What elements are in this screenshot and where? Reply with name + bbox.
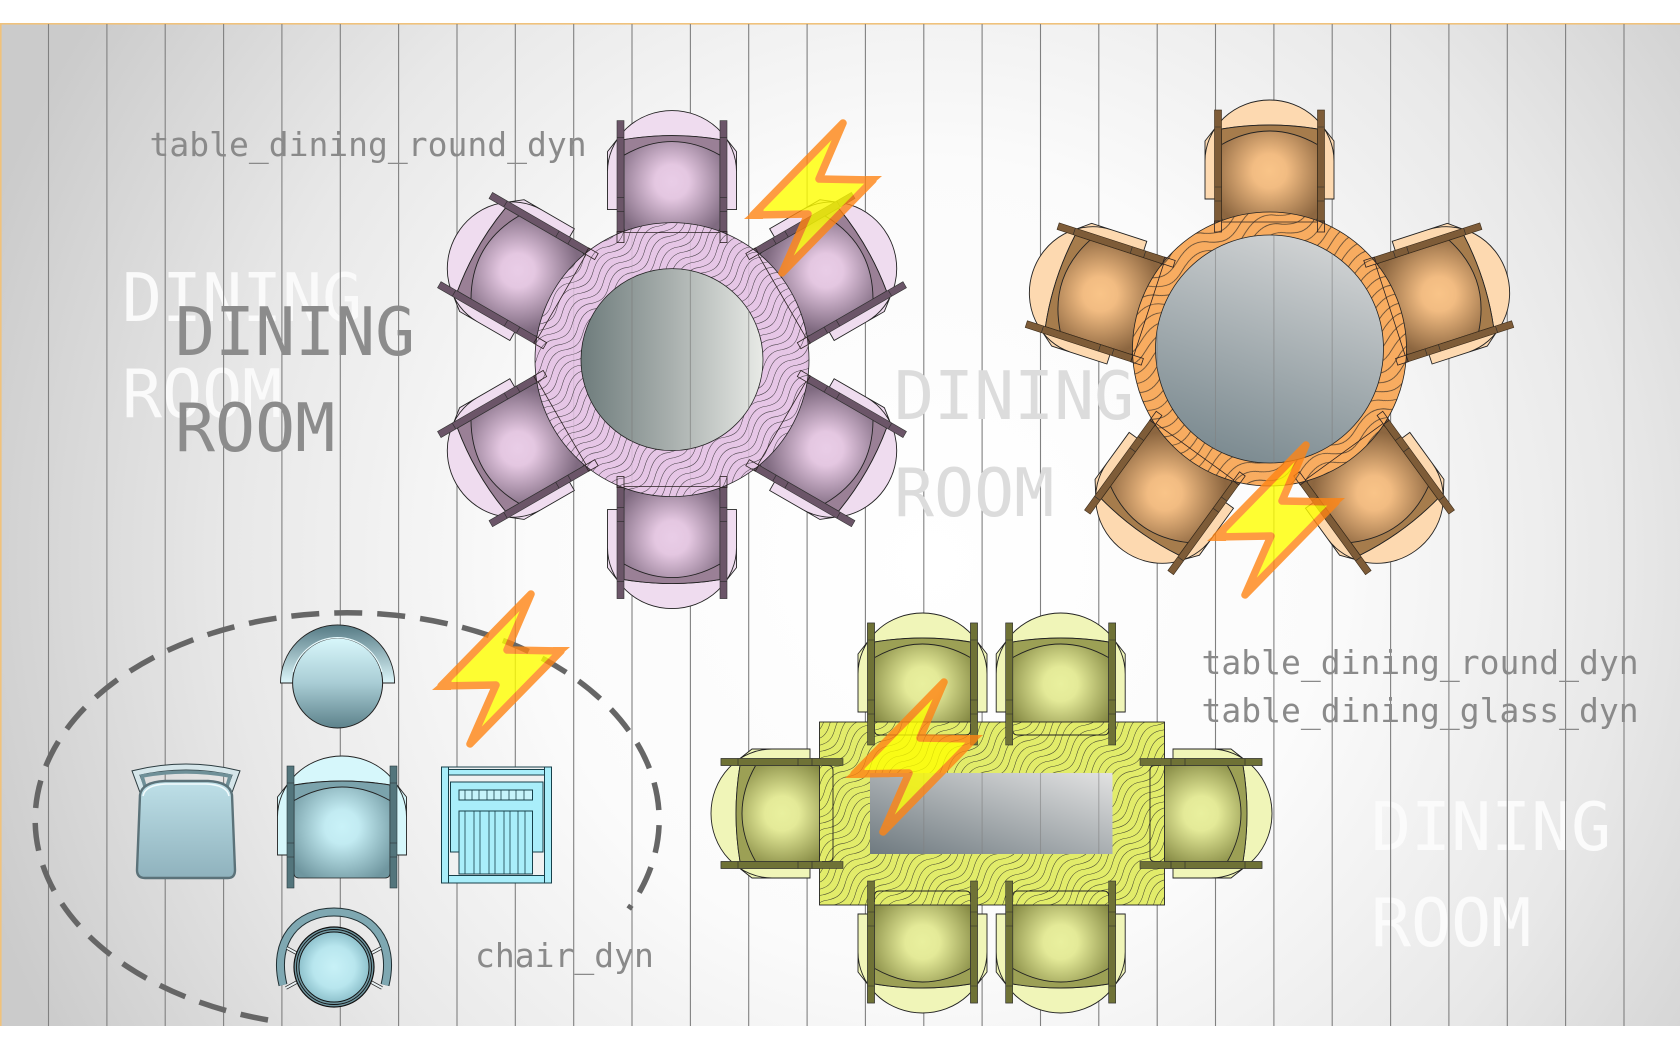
orange chair left [1013, 211, 1178, 374]
orange chair lower right [1286, 406, 1468, 588]
grey dining room label [175, 293, 415, 467]
label: table_dining_round_dyn top: table_dining_round_dyn [150, 125, 587, 165]
pale dining room label: ROOM [894, 454, 1054, 532]
teal chair: armchair, centre [278, 756, 406, 888]
purple chair lower right [741, 362, 920, 540]
white dining room label, left: ROOM [122, 355, 282, 433]
purple chair lower left [424, 362, 603, 540]
white dining room label, left: DINING [122, 259, 362, 337]
round glass top, purple table [581, 269, 763, 451]
labels: table names right: table_dining_glass_dyn [1202, 691, 1639, 731]
white dining room label, left [122, 259, 362, 433]
green chair bottom right [996, 881, 1125, 1013]
purple chair bottom [608, 477, 736, 609]
dashed ellipse [35, 613, 659, 1020]
green chair right [1140, 749, 1272, 878]
white dining room label, right: DINING [1371, 788, 1611, 866]
purple chair upper right [741, 179, 920, 357]
green chair top left [858, 613, 987, 745]
purple wood ring [534, 223, 810, 497]
purple round table with six chairs [32, 110, 907, 1020]
lightning bolt on orange table [1207, 445, 1345, 595]
grey dining room label: DINING [175, 293, 415, 371]
purple chair top [608, 111, 736, 243]
labels: table names right: table_dining_round_dyn [1202, 643, 1639, 683]
teal chair: round seat with horseshoe back, bottom [280, 912, 388, 1007]
green rectangular table with six chairs [710, 612, 1272, 1014]
teal chair: curved back, left [136, 767, 236, 878]
green wood table top [721, 623, 1262, 1003]
orange chair right [1361, 211, 1526, 374]
lightning bolt over chair group [432, 594, 570, 744]
green chair left [711, 749, 843, 878]
green chair bottom left [858, 881, 987, 1013]
grey dining room label: ROOM [175, 389, 335, 467]
chair collection, teal [35, 613, 659, 1020]
label: chair_dyn: chair_dyn [475, 936, 654, 976]
white dining room label, right: ROOM [1371, 884, 1531, 962]
teal chair: slatted, right [442, 767, 552, 883]
orange wood ring [1131, 212, 1408, 486]
lightning bolt on purple table [744, 123, 882, 273]
white dining room label, right [1371, 788, 1611, 962]
lightning bolt on green table [845, 682, 983, 832]
green chair top right [996, 613, 1125, 745]
teal chair: round seat, top [280, 625, 395, 728]
rectangular glass top [870, 773, 1112, 854]
labels: table names right [1202, 643, 1639, 731]
orange chair lower left [1071, 406, 1253, 588]
pale dining room label: DINING [894, 357, 1134, 435]
orange chair top [1205, 100, 1334, 232]
purple chair upper left [424, 179, 603, 357]
orange round table with five chairs [1024, 100, 1514, 586]
round glass top, orange table [1156, 235, 1384, 463]
pale dining room label [894, 357, 1134, 532]
